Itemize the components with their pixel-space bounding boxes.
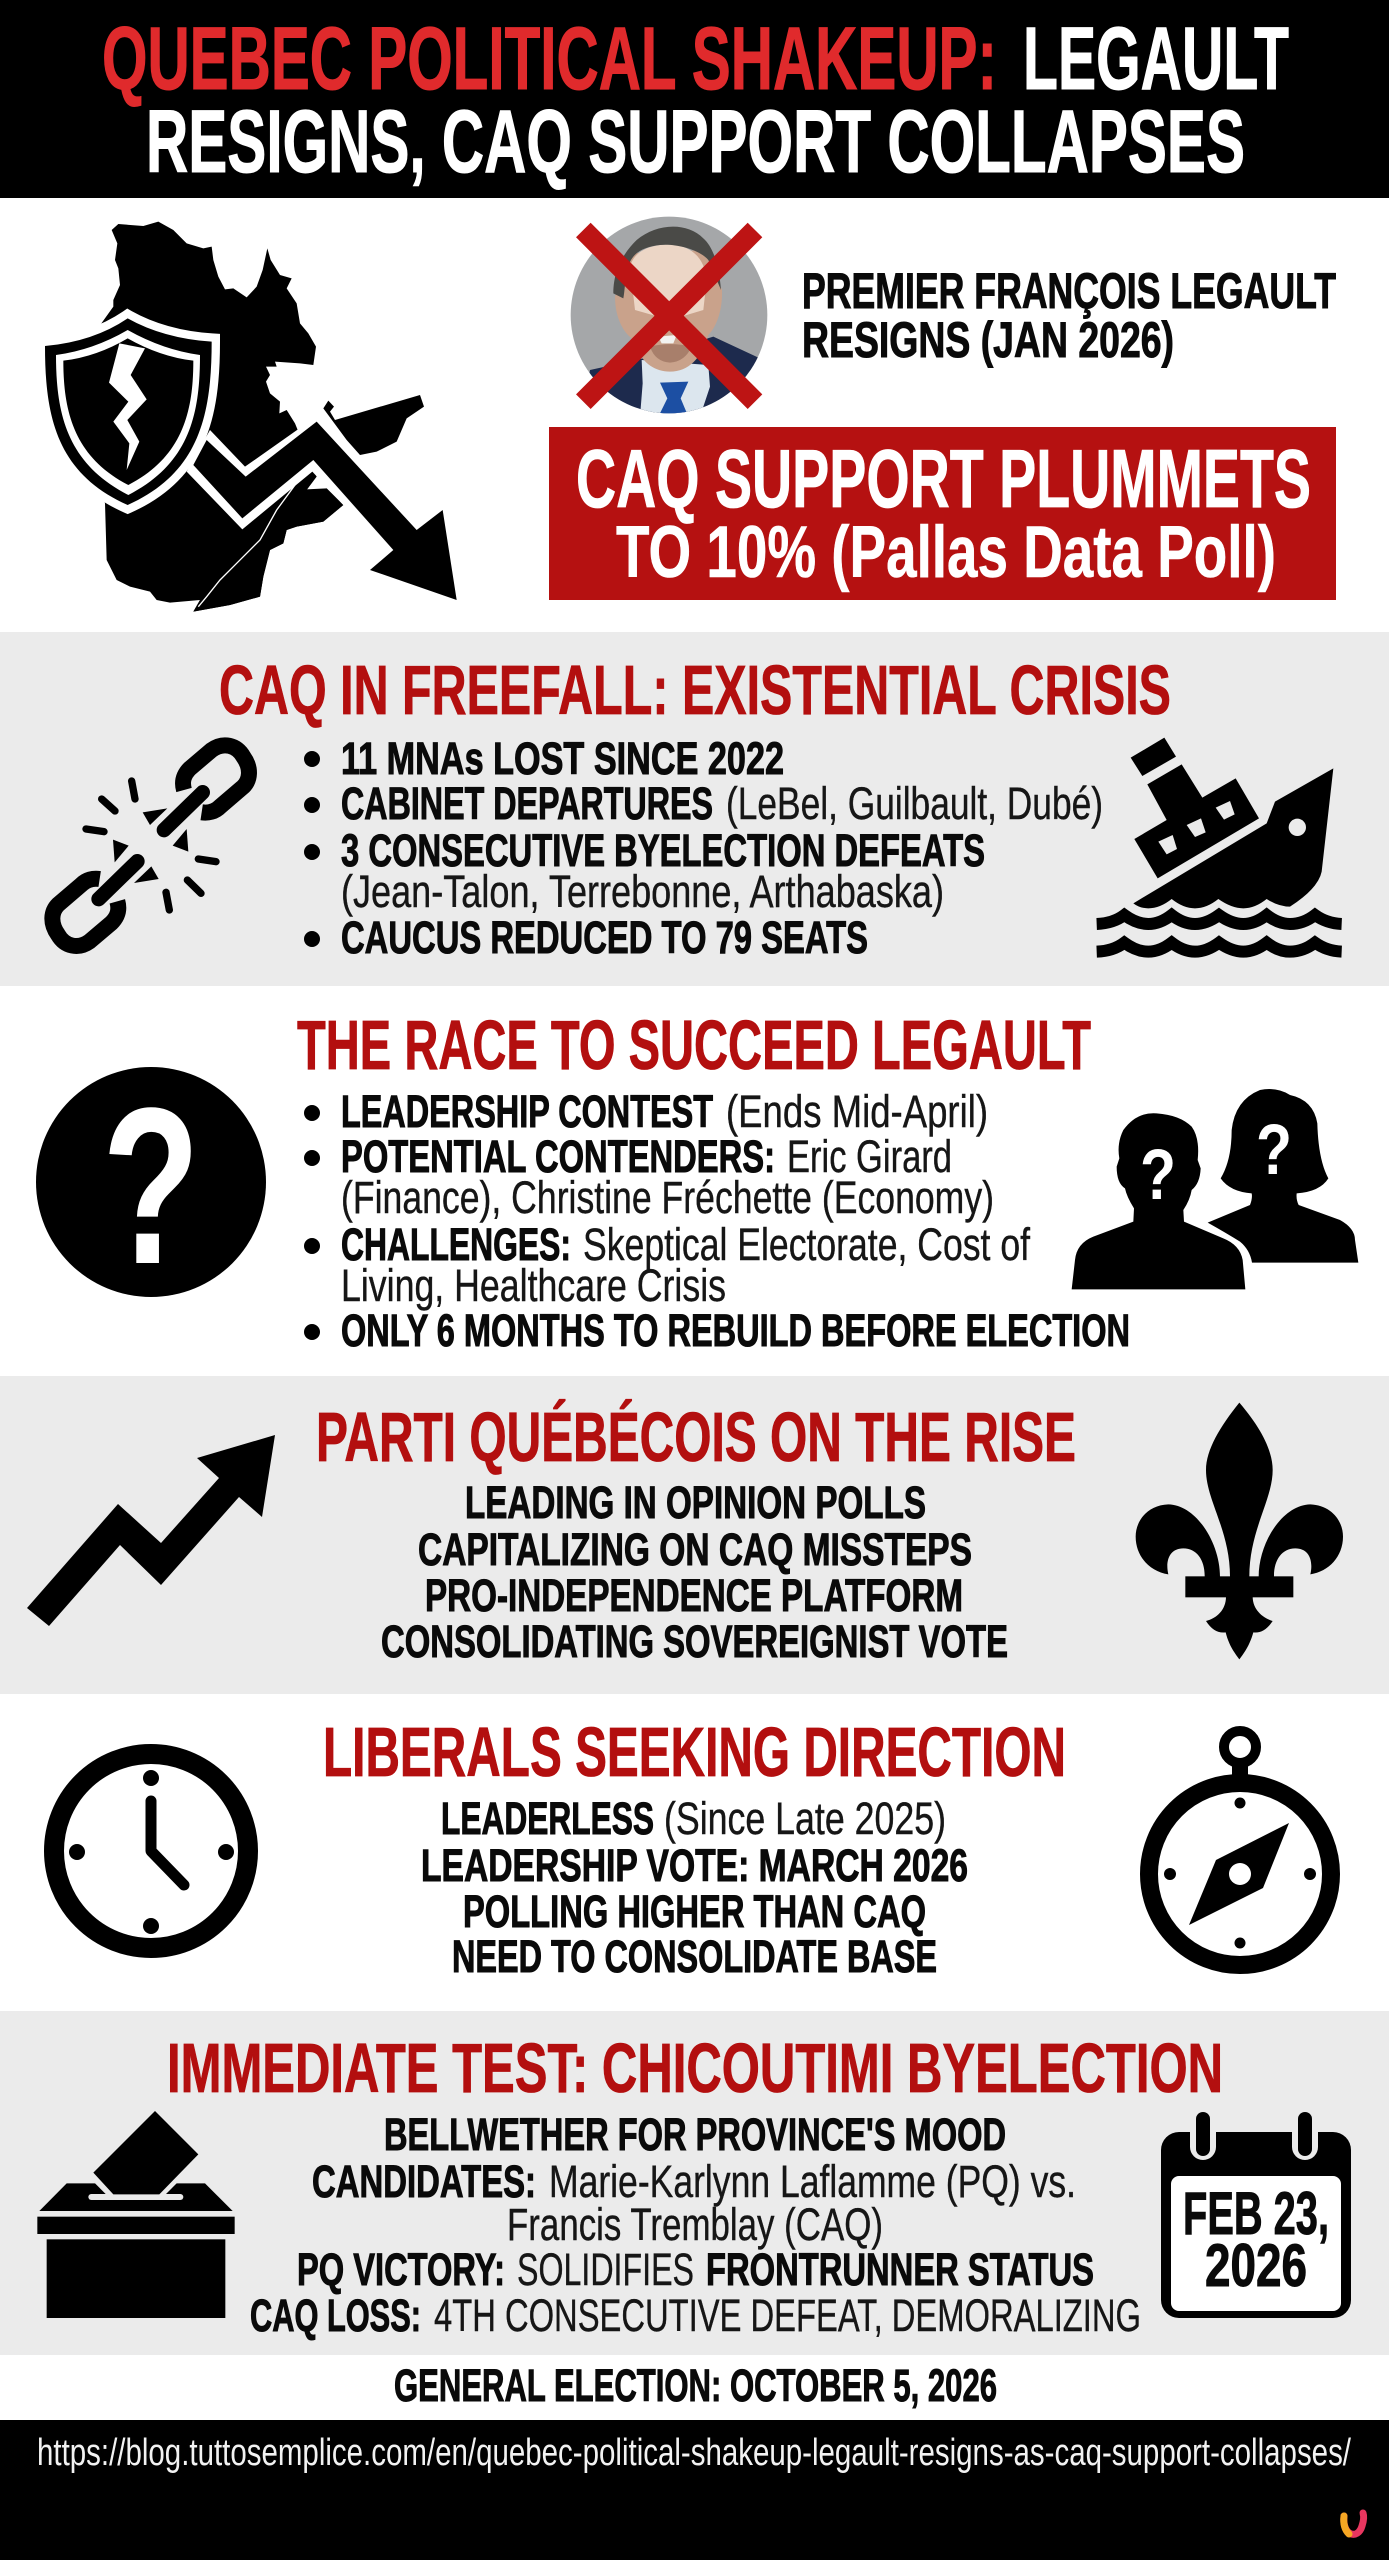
bullet list: (Finance), Christine Fréchette (Economy) bbox=[341, 1172, 994, 1223]
text: Liberal points: POLLING HIGHER THAN CAQ bbox=[463, 1886, 926, 1937]
icon: unknown contenders: ? bbox=[1140, 1135, 1176, 1215]
icon: ballot box bbox=[37, 2111, 235, 2318]
heading: LIBERALS SEEKING DIRECTION bbox=[323, 1713, 1066, 1791]
bullet list: 3 CONSECUTIVE BYELECTION DEFEATS bbox=[341, 825, 985, 876]
panel: Parti Québécois on the rise bbox=[0, 1376, 1389, 1694]
text: byelection points: FRONTRUNNER STATUS bbox=[706, 2244, 1094, 2295]
text: Liberal points: (Since Late 2025) bbox=[664, 1793, 946, 1844]
text: PQ points: CAPITALIZING ON CAQ MISSTEPS bbox=[418, 1524, 972, 1575]
panel: Chicoutimi byelection bbox=[0, 2011, 1389, 2355]
bullet list: POTENTIAL CONTENDERS: bbox=[341, 1131, 775, 1182]
text: PQ points bbox=[381, 1477, 1008, 1667]
text: byelection points bbox=[250, 2109, 1141, 2341]
text: Liberal points: LEADERLESS bbox=[441, 1793, 654, 1844]
text: PQ points: CONSOLIDATING SOVEREIGNIST VOTE bbox=[381, 1616, 1008, 1667]
icon: unknown contenders bbox=[1072, 1089, 1358, 1289]
icon: rising arrow bbox=[27, 1435, 275, 1626]
portrait: crossed-out Legault bbox=[571, 217, 767, 423]
callout: CAQ support 10% bbox=[549, 427, 1336, 600]
icon: Quebec map with broken shield and falling arrow bbox=[45, 222, 457, 612]
text: byelection points: BELLWETHER FOR PROVINCE'S MOOD bbox=[384, 2109, 1006, 2160]
bullet list: Skeptical Electorate, Cost of bbox=[583, 1219, 1030, 1270]
text: Liberal points: NEED TO CONSOLIDATE BASE bbox=[452, 1931, 937, 1982]
bullet list: 11 MNAs LOST SINCE 2022 bbox=[341, 733, 784, 784]
bullet list: (Ends Mid-April) bbox=[726, 1086, 988, 1137]
icon: broken chain bbox=[52, 745, 249, 946]
text: PQ points: PRO-INDEPENDENCE PLATFORM bbox=[425, 1570, 963, 1621]
general election date: GENERAL ELECTION: OCTOBER 5, 2026 bbox=[394, 2360, 997, 2411]
icon: calendar Feb 23 2026 bbox=[1161, 2112, 1351, 2318]
panel: Liberals seeking direction bbox=[0, 1694, 1389, 2011]
bullet list bbox=[304, 1086, 1130, 1356]
bullet list: (LeBel, Guilbault, Dubé) bbox=[726, 778, 1103, 829]
bullet list bbox=[304, 733, 1103, 963]
icon: fleur-de-lis bbox=[1136, 1403, 1343, 1659]
bullet list: (Jean-Talon, Terrebonne, Arthabaska) bbox=[341, 866, 944, 917]
panel: resignation hero bbox=[45, 216, 1336, 612]
footer bar with source URL bbox=[0, 2420, 1389, 2560]
text: premier resigns bbox=[802, 263, 1336, 368]
icon: sinking ship bbox=[1097, 738, 1342, 952]
bullet list: Eric Girard bbox=[787, 1131, 952, 1182]
panel: CAQ in freefall bbox=[0, 632, 1389, 986]
text: Liberal points bbox=[421, 1793, 968, 1982]
icon: question mark circle: ? bbox=[102, 1062, 200, 1311]
text: byelection points: Francis Tremblay (CAQ) bbox=[507, 2199, 883, 2250]
bullet list: CABINET DEPARTURES bbox=[341, 778, 713, 829]
general election date bbox=[0, 2355, 1389, 2420]
icon: clock bbox=[54, 1754, 248, 1948]
text: byelection points: 4TH CONSECUTIVE DEFEAT, DEMORALIZING bbox=[434, 2290, 1141, 2341]
bullet list: CAUCUS REDUCED TO 79 SEATS bbox=[341, 912, 868, 963]
icon: compass bbox=[1149, 1731, 1331, 1965]
text: byelection points: CANDIDATES: bbox=[312, 2156, 536, 2207]
text: byelection points: SOLIDIFIES bbox=[517, 2244, 694, 2295]
text: premier resigns: RESIGNS (JAN 2026) bbox=[802, 312, 1174, 368]
icon: question mark circle bbox=[36, 1062, 266, 1311]
icon: unknown contenders: ? bbox=[1256, 1110, 1292, 1190]
icon: brand logo bbox=[1344, 2513, 1364, 2534]
text: byelection points: PQ VICTORY: bbox=[297, 2244, 505, 2295]
text: byelection points: CAQ LOSS: bbox=[250, 2290, 421, 2341]
icon: calendar Feb 23 2026: 2026 bbox=[1205, 2232, 1307, 2299]
text: Liberal points: LEADERSHIP VOTE: MARCH 2026 bbox=[421, 1840, 968, 1891]
bullet list: Living, Healthcare Crisis bbox=[341, 1260, 726, 1311]
text: byelection points: Marie-Karlynn Laflamme (PQ) vs. bbox=[549, 2156, 1076, 2207]
text: PQ points: LEADING IN OPINION POLLS bbox=[465, 1477, 926, 1528]
header banner bbox=[0, 0, 1389, 198]
panel: race to succeed Legault bbox=[0, 986, 1389, 1376]
bullet list: CHALLENGES: bbox=[341, 1219, 571, 1270]
bullet list: LEADERSHIP CONTEST bbox=[341, 1086, 713, 1137]
